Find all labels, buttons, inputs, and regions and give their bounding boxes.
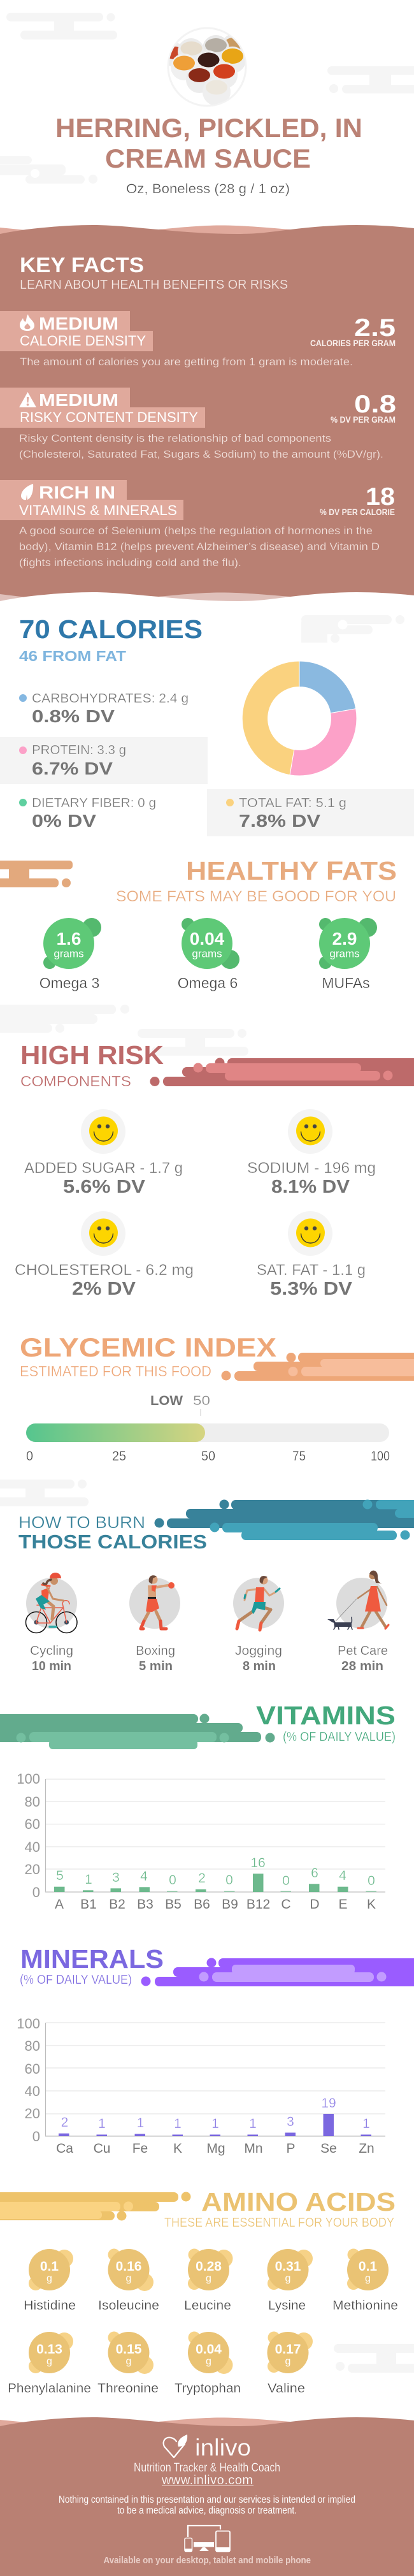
decorative cloud: amino acids xyxy=(0,2192,191,2221)
bar chart: vitamins: 0 xyxy=(225,1873,233,1888)
bar chart: vitamins: B2 xyxy=(109,1897,125,1912)
fat item: omega 6: grams xyxy=(192,947,222,960)
icon: warning triangle xyxy=(19,392,36,407)
bar chart: vitamins: 80 xyxy=(25,1794,40,1810)
logo: inlivo: inlivo xyxy=(195,2434,251,2461)
icon: boxer xyxy=(141,1575,175,1629)
text: risky content description: (Cholesterol, Saturated Fat, Sugars & Sodium) to the amount (%DV/gr). xyxy=(19,448,383,460)
subheading: minerals: (% OF DAILY VALUE) xyxy=(20,1973,132,1987)
bar chart: vitamins: C xyxy=(281,1897,291,1912)
bar chart: minerals: 19 xyxy=(321,2096,336,2111)
bar chart: vitamins: 3 xyxy=(112,1870,120,1885)
bar chart: vitamins: 20 xyxy=(25,1861,40,1877)
risk item: saturated fat: 5.3% DV xyxy=(270,1279,353,1299)
icon: cyclist xyxy=(25,1573,77,1633)
bar chart: minerals: Zn xyxy=(359,2141,375,2156)
icon: leaf xyxy=(21,484,33,500)
bar chart: minerals xyxy=(17,2016,385,2156)
amino: methionine: g xyxy=(365,2273,371,2284)
activity: boxing xyxy=(129,1575,180,1673)
fat item: MUFAs xyxy=(319,918,377,991)
title: HERRING, PICKLED, IN xyxy=(55,113,362,143)
risk item: cholesterol xyxy=(15,1211,194,1299)
bar chart: vitamins: 0 xyxy=(169,1873,176,1888)
amino: threonine: Threonine xyxy=(97,2381,159,2396)
bar chart: vitamins: 6 xyxy=(311,1866,318,1881)
icon: flame xyxy=(20,314,34,331)
bar chart: minerals: Se xyxy=(320,2141,337,2156)
decorative cloud: healthy fats xyxy=(0,861,73,887)
bar chart: minerals: 1 xyxy=(249,2116,257,2131)
bar chart: vitamins: 1 xyxy=(85,1872,92,1887)
amino: methionine xyxy=(332,2249,398,2313)
fat item: omega 6 xyxy=(178,918,239,991)
heading: vitamins: VITAMINS xyxy=(256,1701,396,1730)
amino: phenylalanine: Phenylalanine xyxy=(8,2381,91,2396)
background cloud: amino acids xyxy=(334,2344,414,2373)
bar chart: minerals: Mg xyxy=(206,2141,225,2156)
text: vitamins and minerals description: body), Vitamin B12 (helps prevent Alzheimer’s disease) and Vitamin D xyxy=(19,541,380,553)
risk item: added sugar: ADDED SUGAR - 1.7 g xyxy=(24,1160,183,1177)
bar chart: vitamins xyxy=(17,1771,385,1912)
activity: jogging: 8 min xyxy=(243,1659,276,1673)
stat: dv per calorie: % DV PER CALORIE xyxy=(320,507,395,517)
risk item: saturated fat: SAT. FAT - 1.1 g xyxy=(257,1262,366,1279)
background cloud: left of title xyxy=(0,156,97,184)
badge: risky content density: RISKY CONTENT DENSITY xyxy=(20,409,198,425)
amino: lysine xyxy=(268,2249,313,2313)
amino: threonine: 0.15 xyxy=(116,2342,142,2357)
stat: dv per gram xyxy=(331,391,396,425)
amino: phenylalanine: g xyxy=(46,2356,52,2367)
bar chart: minerals: 1 xyxy=(174,2116,182,2131)
gauge scale: 25 xyxy=(112,1449,126,1464)
bar chart: minerals: Cu xyxy=(94,2141,110,2156)
background clouds: high risk xyxy=(0,1005,248,1056)
bar chart: minerals: Ca xyxy=(56,2141,73,2156)
bar chart: minerals: 40 xyxy=(25,2083,40,2099)
bar chart: vitamins: 2 xyxy=(198,1871,206,1886)
bar chart: vitamins: B12 xyxy=(246,1897,270,1912)
amino: tryptophan: Tryptophan xyxy=(175,2381,241,2396)
risk item: sodium: 8.1% DV xyxy=(271,1177,350,1197)
badge: risky content density: MEDIUM xyxy=(39,390,118,410)
decorative cloud: glycemic index xyxy=(222,1353,414,1381)
legend: dietary fiber: DIETARY FIBER: 0 g xyxy=(32,796,156,810)
risk item: sodium: SODIUM - 196 mg xyxy=(247,1160,376,1177)
badge: vitamins and minerals xyxy=(0,480,183,520)
bar chart: minerals: Mn xyxy=(244,2141,263,2156)
text: vitamins and minerals description: (fights infections including cold and the flu). xyxy=(19,557,241,569)
bar chart: vitamins: A xyxy=(55,1897,64,1912)
amino: methionine: 0.1 xyxy=(359,2259,377,2274)
heading: how to burn those calories: THOSE CALORIES xyxy=(18,1531,207,1553)
panel: key facts xyxy=(0,225,414,618)
amino: threonine xyxy=(97,2332,159,2396)
stat: dv per calorie: 18 xyxy=(366,483,395,511)
amino: histidine: 0.1 xyxy=(40,2259,59,2274)
amino: methionine: Methionine xyxy=(332,2298,398,2313)
logo: inlivo xyxy=(164,2434,251,2461)
amino: tryptophan xyxy=(175,2332,241,2396)
heading: amino acids: AMINO ACIDS xyxy=(201,2187,396,2216)
bar chart: minerals: 1 xyxy=(137,2116,144,2130)
bar chart: minerals: 60 xyxy=(25,2061,40,2077)
fat item: omega 3: grams xyxy=(54,947,84,960)
subheading: healthy fats: SOME FATS MAY BE GOOD FOR YOU xyxy=(116,888,396,905)
subheading: amino acids: THESE ARE ESSENTIAL FOR YOUR BODY xyxy=(164,2216,394,2230)
title xyxy=(55,113,362,173)
amino: leucine xyxy=(184,2249,233,2313)
background cloud: burn xyxy=(0,1480,89,1506)
risk item: saturated fat xyxy=(257,1211,366,1299)
amino: phenylalanine: 0.13 xyxy=(36,2342,62,2357)
gauge scale: 50 xyxy=(201,1449,215,1464)
food photo: sauce bowls xyxy=(162,28,246,106)
amino: leucine: Leucine xyxy=(184,2298,231,2313)
gauge scale: 100 xyxy=(371,1449,390,1464)
bar chart: minerals: 3 xyxy=(287,2114,294,2129)
fat item: omega 3: Omega 3 xyxy=(39,975,99,991)
amino: histidine: g xyxy=(46,2273,52,2284)
legend: total fat: TOTAL FAT: 5.1 g xyxy=(239,796,346,810)
bar chart: vitamins: 100 xyxy=(17,1771,40,1787)
stat: dv per gram: % DV PER GRAM xyxy=(331,415,396,425)
activity: jogging xyxy=(233,1576,284,1673)
bar chart: minerals: P xyxy=(286,2141,296,2156)
badge: risky content density xyxy=(0,388,205,428)
text: tagline: Nutrition Tracker & Health Coach xyxy=(134,2461,280,2475)
legend: protein xyxy=(0,737,208,784)
legend: dietary fiber xyxy=(19,796,156,831)
bar chart: minerals: 1 xyxy=(98,2116,106,2131)
amino: valine xyxy=(268,2332,313,2396)
fat item: omega 3 xyxy=(39,918,101,991)
amino: threonine: g xyxy=(126,2356,131,2367)
amino: histidine xyxy=(24,2249,76,2313)
link: website: www.inlivo.com xyxy=(161,2473,253,2487)
bar chart: vitamins: 0 xyxy=(32,1884,40,1900)
amino: isoleucine xyxy=(98,2249,159,2313)
fat item: omega 3: 1.6 xyxy=(57,929,81,949)
amino: tryptophan: g xyxy=(206,2356,211,2367)
subheading: vitamins: (% OF DAILY VALUE) xyxy=(283,1730,396,1744)
subheading: key facts: LEARN ABOUT HEALTH BENEFITS OR RISKS xyxy=(20,278,288,292)
donut chart: macronutrients xyxy=(242,661,357,776)
serving size: Oz, Boneless (28 g / 1 oz) xyxy=(126,182,290,196)
background cloud: top left xyxy=(6,13,117,40)
badge: calorie density: MEDIUM xyxy=(39,314,118,333)
bar chart: minerals: 1 xyxy=(362,2116,370,2131)
bar chart: vitamins: 16 xyxy=(250,1856,266,1870)
amino: leucine: g xyxy=(206,2273,211,2284)
gauge label: low 50 xyxy=(150,1394,210,1416)
amino: leucine: 0.28 xyxy=(196,2259,222,2274)
text: risky content description: Risky Content density is the relationship of bad components xyxy=(19,432,331,444)
bar chart: minerals: 100 xyxy=(17,2016,40,2032)
badge: vitamins and minerals: VITAMINS & MINERALS xyxy=(19,502,177,518)
bar chart: vitamins: B9 xyxy=(222,1897,238,1912)
risk item: sodium xyxy=(247,1109,376,1197)
bar chart: vitamins: 5 xyxy=(56,1868,64,1883)
risk item: added sugar: 5.6% DV xyxy=(63,1177,146,1197)
risk item: added sugar xyxy=(24,1109,183,1197)
heading: minerals: MINERALS xyxy=(20,1944,164,1974)
amino: isoleucine: g xyxy=(126,2273,131,2284)
bar chart: vitamins: 4 xyxy=(339,1868,346,1883)
bar chart: vitamins: 0 xyxy=(368,1874,375,1888)
heading: key facts: KEY FACTS xyxy=(20,253,144,277)
subheading: from fat: 46 FROM FAT xyxy=(19,648,126,664)
bar chart: vitamins: B1 xyxy=(80,1897,97,1912)
text: availability: Available on your desktop, tablet and mobile phone xyxy=(103,2555,311,2566)
title: CREAM SAUCE xyxy=(105,143,311,173)
bar chart: minerals: Fe xyxy=(132,2141,148,2156)
bar chart: vitamins: 0 xyxy=(282,1874,290,1888)
decorative cloud: burn xyxy=(154,1499,414,1540)
bar chart: vitamins: 60 xyxy=(25,1816,40,1832)
badge: calorie density xyxy=(0,311,153,351)
heading: high risk: HIGH RISK xyxy=(20,1040,164,1070)
text: disclaimer xyxy=(59,2494,355,2516)
gauge label: low 50: 50 xyxy=(193,1394,210,1408)
amino: lysine: Lysine xyxy=(268,2298,306,2313)
bar chart: minerals: 20 xyxy=(25,2106,40,2121)
bar chart: minerals: K xyxy=(173,2141,182,2156)
amino: histidine: Histidine xyxy=(24,2298,76,2313)
gauge scale: 75 xyxy=(292,1449,306,1464)
heading: how to burn those calories: HOW TO BURN xyxy=(18,1513,145,1532)
icon: jogger xyxy=(237,1576,280,1630)
label: cycling: Cycling xyxy=(30,1643,73,1658)
legend: total fat xyxy=(207,789,414,836)
text: disclaimer: Nothing contained in this presentation and our services is intended or implied xyxy=(59,2494,355,2505)
bar chart: vitamins: B3 xyxy=(137,1897,153,1912)
bar chart: vitamins: D xyxy=(310,1897,320,1912)
activity: cycling xyxy=(25,1573,77,1673)
risk item: cholesterol: CHOLESTEROL - 6.2 mg xyxy=(15,1262,194,1279)
bar chart: vitamins: 40 xyxy=(25,1839,40,1855)
stat: calories per gram: 2.5 xyxy=(354,314,396,342)
bar chart: vitamins: B6 xyxy=(194,1897,210,1912)
bar chart: vitamins: 4 xyxy=(140,1869,148,1884)
bar chart: minerals: 2 xyxy=(61,2115,68,2130)
amino: tryptophan: 0.04 xyxy=(196,2342,222,2357)
stat: calories per gram: CALORIES PER GRAM xyxy=(310,338,396,348)
decorative cloud: minerals xyxy=(141,1958,414,1986)
bar chart: vitamins: B5 xyxy=(165,1897,182,1912)
heading: how to burn those calories xyxy=(18,1513,207,1553)
label: jogging: Jogging xyxy=(235,1643,282,1658)
panel: footer xyxy=(0,2417,414,2576)
fat item: omega 6: Omega 6 xyxy=(178,975,238,991)
heading: 70 calories: 70 CALORIES xyxy=(19,615,203,644)
activity: pet care xyxy=(327,1571,389,1673)
fat item: MUFAs: 2.9 xyxy=(332,929,357,949)
label: boxing: Boxing xyxy=(136,1643,175,1658)
label: pet care: Pet Care xyxy=(338,1643,388,1658)
fat item: omega 6: 0.04 xyxy=(190,929,225,949)
text: risky content description xyxy=(19,432,383,460)
gauge bar: glycemic index xyxy=(26,1423,389,1442)
subheading: glycemic index: ESTIMATED FOR THIS FOOD xyxy=(20,1363,211,1379)
icon: woman walking dog xyxy=(327,1571,389,1629)
decorative cloud: high risk xyxy=(150,1058,414,1086)
amino: isoleucine: 0.16 xyxy=(116,2259,141,2274)
amino: phenylalanine xyxy=(8,2332,91,2396)
amino: isoleucine: Isoleucine xyxy=(98,2298,159,2313)
bar chart: vitamins: E xyxy=(338,1897,348,1912)
amino: valine: 0.17 xyxy=(275,2342,301,2357)
background cloud: calories xyxy=(301,615,404,643)
risk item: cholesterol: 2% DV xyxy=(72,1279,136,1299)
stat: dv per calorie xyxy=(320,483,395,517)
legend: protein: PROTEIN: 3.3 g xyxy=(32,743,126,757)
bar chart: vitamins: K xyxy=(367,1897,376,1912)
text: vitamins and minerals description xyxy=(19,525,380,569)
stat: dv per gram: 0.8 xyxy=(354,391,396,418)
text: calorie density description: The amount of calories you are getting from 1 gram is moderate. xyxy=(20,356,353,368)
subheading: components: COMPONENTS xyxy=(20,1073,131,1089)
legend: total fat: 7.8% DV xyxy=(239,811,320,831)
bar chart: minerals: 1 xyxy=(211,2116,219,2131)
background cloud: top right xyxy=(327,66,414,93)
legend: dietary fiber: 0% DV xyxy=(32,811,96,831)
icon: devices xyxy=(185,2526,230,2552)
fat item: MUFAs: MUFAs xyxy=(322,975,370,991)
gauge scale: 0 xyxy=(26,1449,33,1464)
amino: lysine: g xyxy=(285,2273,290,2284)
gauge label: low 50: LOW xyxy=(150,1394,183,1408)
badge: vitamins and minerals: RICH IN xyxy=(39,483,115,502)
activity: boxing: 5 min xyxy=(139,1659,173,1673)
activity: pet care: 28 min xyxy=(341,1659,383,1673)
activity: cycling: 10 min xyxy=(32,1659,71,1673)
text: vitamins and minerals description: A good source of Selenium (helps the regulation of hormones in the xyxy=(19,525,373,537)
text: disclaimer: to be a medical advice, diagnosis or treatment. xyxy=(117,2505,297,2516)
legend: carbohydrates: 0.8% DV xyxy=(32,706,115,726)
legend: carbohydrates xyxy=(19,692,189,726)
legend: protein: 6.7% DV xyxy=(32,759,113,778)
bar chart: minerals: 0 xyxy=(32,2128,40,2144)
badge: calorie density: CALORIE DENSITY xyxy=(20,333,146,349)
amino: lysine: 0.31 xyxy=(275,2259,301,2274)
stat: calories per gram xyxy=(310,314,396,348)
amino: valine: g xyxy=(285,2356,290,2367)
fat item: MUFAs: grams xyxy=(329,947,360,960)
bar chart: minerals: 80 xyxy=(25,2038,40,2054)
heading: healthy fats: HEALTHY FATS xyxy=(186,856,397,885)
decorative cloud: vitamins xyxy=(0,1714,275,1749)
amino: valine: Valine xyxy=(268,2381,305,2396)
heading: glycemic index: GLYCEMIC INDEX xyxy=(20,1332,276,1362)
legend: carbohydrates: CARBOHYDRATES: 2.4 g xyxy=(32,692,189,706)
gauge scale xyxy=(26,1449,390,1464)
